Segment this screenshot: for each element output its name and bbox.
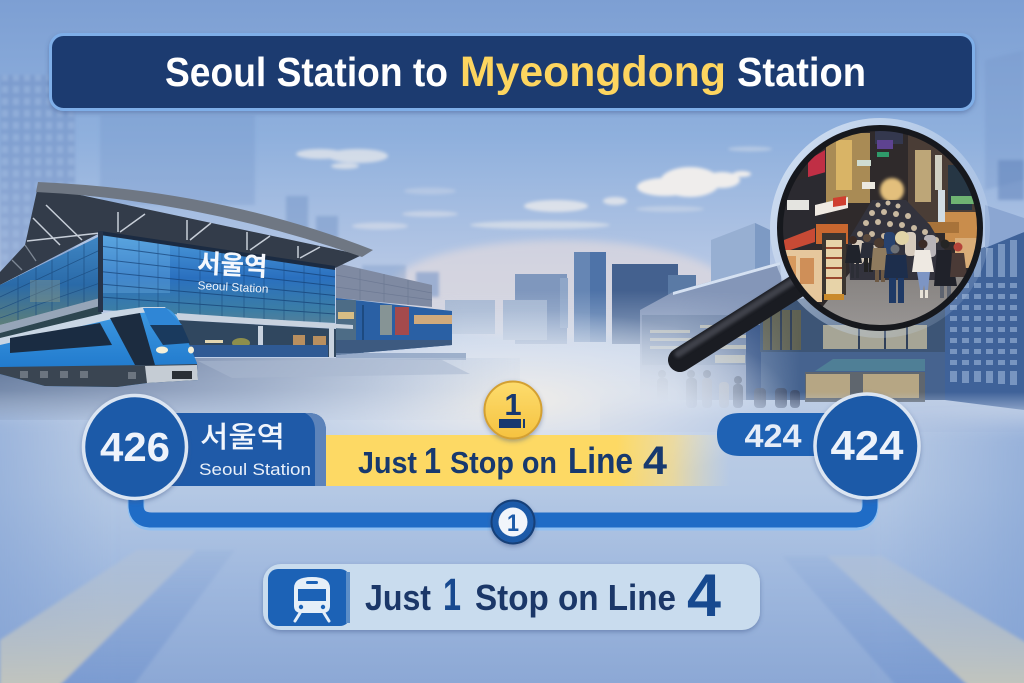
blue train <box>0 307 198 387</box>
right shops <box>908 132 980 268</box>
route line <box>136 488 870 522</box>
station sign English: Seoul Station <box>197 280 269 296</box>
clouds <box>296 146 772 230</box>
road stripes <box>0 550 1024 683</box>
station badge 424 <box>815 394 919 498</box>
English station name: Seoul Station <box>199 460 311 479</box>
route stop marker <box>492 500 534 544</box>
left shops <box>780 133 870 302</box>
warm horizon haze <box>390 240 730 340</box>
station badge 426: 426 <box>100 424 170 470</box>
gold one-stop badge <box>484 382 542 438</box>
summary text: 1 <box>443 569 461 620</box>
station badge 424: 424 <box>830 422 904 469</box>
Korean station name: 서울역 <box>200 421 285 454</box>
left wing glass <box>0 237 102 338</box>
signs at far end <box>857 130 904 202</box>
street scene in lens <box>783 131 977 325</box>
handle <box>678 279 800 360</box>
foreground pedestrians <box>845 231 967 303</box>
lens halo <box>770 118 990 338</box>
station entrance <box>177 313 353 357</box>
bottom summary pill <box>263 562 760 630</box>
station badge 426 <box>84 396 186 498</box>
shopping mall building right <box>640 262 946 402</box>
city skyline <box>445 223 770 344</box>
crowd mass <box>848 200 952 280</box>
glass tower right <box>945 205 1024 410</box>
banner text <box>358 439 668 483</box>
faded background towers left <box>0 75 439 297</box>
title text: Seoul Station to <box>165 49 448 95</box>
destination pill 424 <box>717 413 840 456</box>
under-roof and trusses <box>0 186 362 285</box>
glass facade <box>98 230 335 330</box>
destination pill 424: 424 <box>744 418 802 454</box>
crowd silhouettes near mall <box>657 370 800 408</box>
icon: train <box>268 569 350 626</box>
lens rim <box>780 128 980 328</box>
summary text: Just <box>365 577 431 618</box>
banner text: 4 <box>643 439 668 483</box>
Seoul Station building <box>0 182 466 362</box>
station sign Korean: 서울역 <box>197 248 268 282</box>
Seoul Station label plate <box>170 413 326 486</box>
banner text: Just <box>358 445 417 480</box>
title text: Station <box>737 49 866 95</box>
faded background towers right <box>985 50 1024 200</box>
banner text: 1 <box>424 440 441 481</box>
misty ground fade <box>0 290 1024 683</box>
summary text: Stop on Line <box>475 577 676 618</box>
summary text <box>365 562 722 629</box>
magnifying glass <box>678 118 990 360</box>
route stop marker: 1 <box>507 510 519 537</box>
title text: Myeongdong <box>460 48 726 96</box>
banner text: Line <box>568 440 633 481</box>
summary text: 4 <box>687 562 722 629</box>
title bar <box>50 34 974 110</box>
secondary gray hall <box>336 263 466 360</box>
gold one-stop badge: 1 <box>504 387 522 422</box>
banner text: Stop on <box>450 445 557 480</box>
yellow banner <box>326 435 730 486</box>
curved roof <box>36 182 373 257</box>
plaza ground <box>0 358 520 420</box>
